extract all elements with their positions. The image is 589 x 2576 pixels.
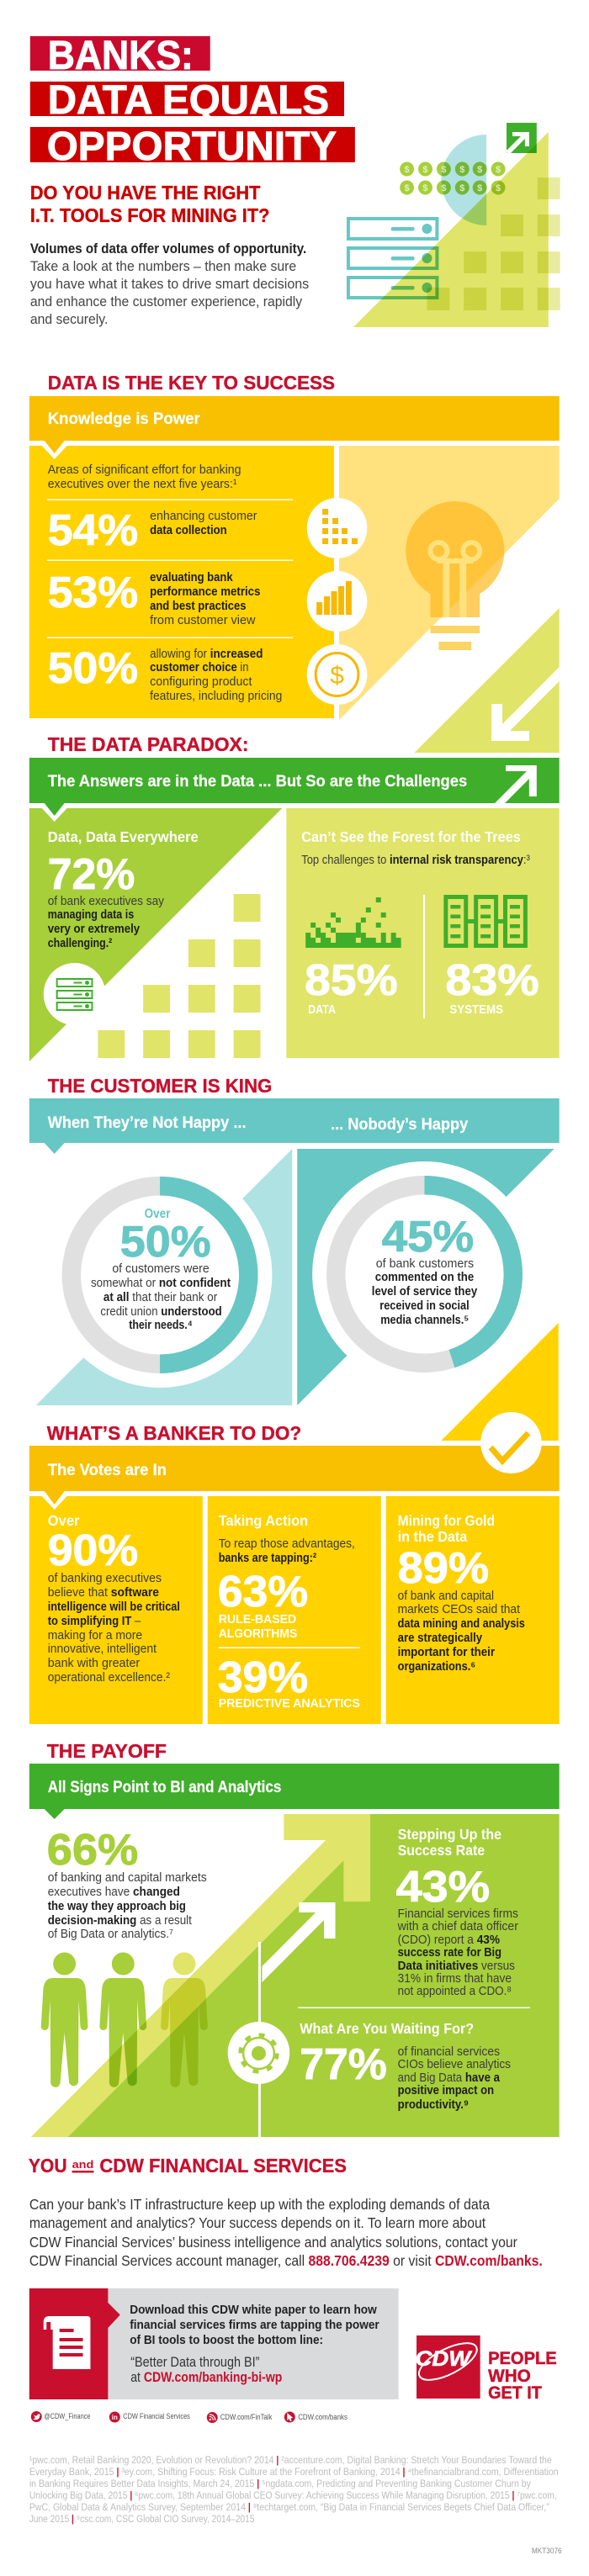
title: OPPORTUNITY bbox=[47, 124, 337, 169]
icon: dollar coins bbox=[400, 161, 505, 195]
stat: 53%: and best practices bbox=[150, 599, 247, 613]
header bar: Knowledge is Power bbox=[48, 410, 200, 428]
stat: 77%: 77% bbox=[300, 2039, 387, 2088]
stat: 43%: with a chief data officer bbox=[397, 1919, 518, 1933]
intro text: Take a look at the numbers – then make sure bbox=[30, 259, 296, 274]
stat: 77% bbox=[300, 2020, 511, 2112]
panel: over 90%: of banking executives bbox=[48, 1571, 162, 1585]
panel: mining for gold bbox=[386, 1496, 560, 1724]
chart: 50% donut: at all that their bank or bbox=[103, 1290, 217, 1304]
stat: 53%: evaluating bank bbox=[150, 570, 233, 584]
panel: data everywhere: 72% bbox=[48, 849, 135, 898]
callout: white paper download bbox=[29, 2288, 399, 2399]
panel: over 90%: making for a more bbox=[48, 1628, 142, 1642]
intro text: Areas of significant effort for banking bbox=[48, 463, 241, 477]
stat: 50%: features, including pricing bbox=[150, 689, 282, 703]
callout: white paper download: of BI tools to boost the bottom line: bbox=[130, 2333, 323, 2347]
panel: can't see the forest: Top challenges to internal risk transparency:³ bbox=[301, 853, 530, 867]
header bar: All Signs Point to BI and Analytics bbox=[48, 1779, 281, 1796]
panel: mining for gold: 89% bbox=[398, 1543, 489, 1592]
icon: pixel stairs bbox=[307, 498, 367, 558]
header bar: The Votes are In bbox=[48, 1462, 167, 1479]
icon: check mark bbox=[480, 1412, 542, 1473]
intro text: and enhance the customer experience, rapidly bbox=[30, 294, 303, 309]
icon: dollar coins: $ bbox=[459, 183, 464, 193]
icon: dollar coins: $ bbox=[459, 165, 464, 175]
panel: data everywhere: managing data is bbox=[48, 907, 134, 922]
title: BANKS: bbox=[48, 34, 194, 78]
intro text bbox=[48, 463, 241, 491]
stat: 50% bbox=[48, 643, 282, 703]
chart: 50% donut bbox=[36, 1149, 292, 1405]
stat: 54%: enhancing customer bbox=[150, 509, 257, 523]
icon: linkedin bbox=[109, 2412, 190, 2422]
chart: 50% donut: 50% bbox=[120, 1217, 211, 1266]
stat: 53%: performance metrics bbox=[150, 584, 260, 599]
icon: servers bbox=[348, 219, 437, 298]
stat: 77%: positive impact on bbox=[398, 2083, 494, 2097]
heading: the payoff: THE PAYOFF bbox=[47, 1740, 167, 1762]
panel: can't see the forest: DATA bbox=[308, 1002, 336, 1017]
footnotes: ¹pwc.com, Retail Banking 2020, Evolution or Revolution? 2014 | ²accenture.com, Digital Banking: Stretch Your Boundaries Toward the bbox=[29, 2454, 552, 2466]
stat: 54% bbox=[48, 505, 257, 554]
stat: 77%: CIOs believe analytics bbox=[398, 2057, 511, 2071]
panel: mining for gold: important for their bbox=[398, 1645, 495, 1659]
panel: over 90%: intelligence will be critical bbox=[48, 1600, 180, 1614]
header bar bbox=[29, 1764, 560, 1819]
chart: 50% donut: somewhat or not confident bbox=[91, 1276, 231, 1290]
icon: dollar coins: $ bbox=[441, 165, 446, 175]
stat: 66%: of Big Data or analytics.⁷ bbox=[48, 1927, 173, 1941]
intro text bbox=[30, 241, 309, 327]
icon: three people bbox=[41, 1953, 208, 2087]
intro text: you have what it takes to drive smart decisions bbox=[30, 277, 309, 292]
panel: taking action: Taking Action bbox=[219, 1512, 308, 1529]
panel: over 90%: to simplifying IT – bbox=[48, 1614, 141, 1628]
chart: 50% donut: Over bbox=[145, 1207, 170, 1221]
closing paragraph: CDW Financial Services’ business intelligence and analytics solutions, contact your bbox=[29, 2234, 517, 2251]
panel: mining for gold: are strategically bbox=[398, 1631, 483, 1645]
panel: data everywhere bbox=[29, 808, 282, 1061]
logo: CDW: GET IT bbox=[488, 2383, 542, 2403]
chart: 50% donut: credit union understood bbox=[100, 1304, 222, 1319]
chart: 45% donut: level of service they bbox=[372, 1284, 478, 1299]
icon: gear bbox=[228, 2022, 289, 2084]
panel: over 90%: bank with greater bbox=[48, 1656, 140, 1670]
illustration: rising arrow background bbox=[31, 1814, 560, 2137]
panel: mining for gold: Mining for Gold bbox=[398, 1512, 495, 1529]
heading: you and cdw financial services: YOU bbox=[29, 2155, 67, 2177]
panel: data everywhere: Data, Data Everywhere bbox=[48, 828, 199, 845]
icon: bar chart bbox=[307, 571, 367, 632]
stat: 54%: data collection bbox=[150, 523, 227, 537]
footnotes: Unlocking Big Data, 2015 | ⁶pwc.com, 18th Annual Global CEO Survey: Achieving Success While Managing Disruption, 2015 | ⁷pwc.com, bbox=[29, 2489, 557, 2501]
panel: can't see the forest: 83% bbox=[445, 955, 539, 1004]
icon: dollar coins: $ bbox=[405, 165, 410, 175]
panel: the votes are in bbox=[29, 1323, 560, 1724]
heading: what's a banker to do: WHAT’S A BANKER TO DO? bbox=[47, 1422, 301, 1444]
icon: cursor bbox=[284, 2412, 348, 2422]
heading: the data paradox: THE DATA PARADOX: bbox=[48, 733, 249, 755]
panel: over 90%: Over bbox=[48, 1512, 80, 1529]
panel: taking action: banks are tapping:² bbox=[219, 1551, 316, 1565]
panel: mining for gold: data mining and analysis bbox=[398, 1616, 525, 1631]
icon: growth arrow square bbox=[506, 123, 537, 155]
logo: CDW: WHO bbox=[488, 2367, 531, 2386]
stat: 77%: and Big Data have a bbox=[398, 2071, 501, 2085]
subtitle question bbox=[30, 182, 269, 226]
stat: 54%: 54% bbox=[48, 505, 138, 554]
footnotes bbox=[29, 2454, 559, 2525]
stat: 43% bbox=[396, 1826, 518, 1998]
icon: dollar coins: $ bbox=[477, 183, 482, 193]
icon: document bbox=[44, 2316, 90, 2369]
footnotes: in Banking Requires Better Data Insights, March 24, 2015 | ⁵ngdata.com, Predicting and Preventing Banking Customer Churn by bbox=[29, 2478, 531, 2489]
stat: 53%: 53% bbox=[48, 568, 138, 616]
stat: 43%: Success Rate bbox=[398, 1842, 485, 1859]
closing paragraph: Can your bank’s IT infrastructure keep up with the exploding demands of data bbox=[29, 2196, 490, 2213]
chart: 45% donut: 45% bbox=[382, 1212, 474, 1261]
stat: 43%: (CDO) report a 43% bbox=[398, 1933, 500, 1947]
chart: 50% donut: their needs.⁴ bbox=[129, 1318, 193, 1332]
stat: 50%: 50% bbox=[48, 643, 138, 692]
stat: 50%: allowing for increased bbox=[150, 647, 263, 661]
stat: 66%: of banking and capital markets bbox=[48, 1870, 207, 1885]
icon: dollar coins: $ bbox=[496, 183, 501, 193]
intro text: executives over the next five years:¹ bbox=[48, 477, 237, 491]
chart: 50% donut: of customers were bbox=[112, 1262, 210, 1276]
icon: dollar coins: $ bbox=[477, 165, 482, 175]
footnotes: June 2015 | ⁹csc.com, CSC Global CIO Survey, 2014–2015 bbox=[29, 2513, 255, 2525]
stat: 66%: decision-making as a result bbox=[48, 1913, 193, 1928]
panel: mining for gold: organizations.⁶ bbox=[398, 1659, 475, 1674]
icon: dollar coins: $ bbox=[422, 183, 428, 193]
footnotes: PwC, Global Data & Analytics Survey, September 2014 | ⁸techtarget.com, “Big Data in Financial Services Begets Chief Data Officer,” bbox=[29, 2501, 549, 2513]
social links bbox=[31, 2411, 348, 2423]
panel: can't see the forest: Can’t See the Forest for the Trees bbox=[301, 828, 521, 845]
closing paragraph bbox=[29, 2196, 543, 2269]
stat: 77%: What Are You Waiting For? bbox=[300, 2020, 474, 2037]
logo: CDW bbox=[414, 2335, 557, 2403]
icon: linkedin: CDW Financial Services bbox=[123, 2412, 190, 2421]
icon: pixel data bbox=[305, 897, 401, 948]
panel: over 90% bbox=[29, 1491, 203, 1724]
stat: 66%: executives have changed bbox=[48, 1885, 180, 1899]
header bar: ... Nobody’s Happy bbox=[331, 1116, 469, 1134]
panel: mining for gold: of bank and capital bbox=[398, 1589, 494, 1603]
chart: 45% donut: of bank customers bbox=[376, 1256, 474, 1271]
icon: cursor: CDW.com/banks bbox=[298, 2413, 348, 2422]
chart: 45% donut: received in social bbox=[379, 1299, 470, 1313]
header bar: The Answers are in the Data ... But So are the Challenges bbox=[48, 773, 467, 791]
subtitle question: DO YOU HAVE THE RIGHT bbox=[30, 182, 260, 204]
panel: the data paradox bbox=[29, 758, 560, 1061]
job code: MKT3076 bbox=[532, 2547, 562, 2555]
panel: knowledge is power bbox=[29, 396, 560, 753]
closing paragraph: management and analytics? Your success depends on it. To learn more about bbox=[29, 2214, 486, 2231]
panel: taking action: ALGORITHMS bbox=[219, 1627, 297, 1641]
callout: white paper download: Download this CDW white paper to learn how bbox=[130, 2303, 377, 2317]
header bar: When They’re Not Happy ... bbox=[48, 1114, 247, 1132]
stat: 77%: productivity.⁹ bbox=[398, 2097, 469, 2112]
panel: taking action: 39% bbox=[218, 1653, 308, 1701]
panel: can't see the forest: SYSTEMS bbox=[449, 1002, 503, 1017]
icon: rss: CDW.com/FinTalk bbox=[220, 2413, 273, 2422]
icon: dollar coin: $ bbox=[330, 662, 344, 690]
panel: over 90%: 90% bbox=[48, 1526, 138, 1574]
stat: 43%: 43% bbox=[396, 1862, 490, 1911]
icon: twitter: @CDW_Finance bbox=[44, 2412, 90, 2421]
header bar bbox=[29, 758, 560, 822]
stat: 53%: from customer view bbox=[150, 613, 256, 627]
heading: you and cdw financial services: CDW FINANCIAL SERVICES bbox=[99, 2155, 347, 2177]
icon: dollar coins: $ bbox=[441, 183, 446, 193]
callout: white paper download: “Better Data through BI” bbox=[130, 2355, 259, 2370]
chart: 45% donut: media channels.⁵ bbox=[380, 1313, 469, 1327]
icon: servers bbox=[44, 963, 105, 1025]
icon: dollar coins: $ bbox=[422, 165, 428, 175]
stat: 43%: not appointed a CDO.⁸ bbox=[398, 1984, 512, 1998]
stat: 66%: the way they approach big bbox=[48, 1899, 186, 1913]
subtitle question: I.T. TOOLS FOR MINING IT? bbox=[30, 204, 269, 226]
illustration: green triangle with arrow bbox=[415, 608, 560, 753]
icon: dollar coins: $ bbox=[496, 165, 501, 175]
panel: taking action: RULE-BASED bbox=[219, 1612, 296, 1627]
stat: 50%: customer choice in bbox=[150, 660, 249, 674]
illustration: light bulb background bbox=[339, 446, 560, 720]
chart: 45% donut: commented on the bbox=[375, 1270, 474, 1284]
stat: 43%: success rate for Big bbox=[398, 1945, 501, 1960]
header bar bbox=[29, 396, 560, 459]
stat: 77%: of financial services bbox=[398, 2044, 500, 2059]
panel: the payoff bbox=[29, 1764, 560, 2137]
header bar bbox=[29, 1098, 560, 1154]
closing paragraph: CDW Financial Services account manager, call 888.706.4239 or visit CDW.com/banks. bbox=[29, 2252, 543, 2269]
intro text: Volumes of data offer volumes of opportunity. bbox=[30, 241, 306, 257]
icon: linkedin: in bbox=[112, 2414, 118, 2421]
title bbox=[30, 34, 355, 169]
stat: 43%: 31% in firms that have bbox=[398, 1971, 512, 1986]
stat: 43%: Stepping Up the bbox=[398, 1826, 501, 1843]
heading: you and cdw financial services: and bbox=[72, 2158, 94, 2171]
callout: white paper download: at CDW.com/banking-bi-wp bbox=[130, 2370, 282, 2385]
stat: 53% bbox=[48, 568, 260, 627]
panel: can't see the forest: 85% bbox=[305, 955, 398, 1004]
stat: 50%: configuring product bbox=[150, 674, 252, 689]
icon: twitter bbox=[31, 2411, 90, 2422]
icon: dollar coins: $ bbox=[405, 183, 410, 193]
icon: up arrow bbox=[495, 765, 537, 803]
footnotes: Everyday Bank, 2015 | ³ey.com, Shifting Focus: Risk Culture at the Forefront of Banking, 2014 | ⁴thefinancialbrand.com, Differentiation bbox=[29, 2466, 559, 2478]
heading: the customer is king: THE CUSTOMER IS KING bbox=[48, 1075, 272, 1097]
icon: dollar coin bbox=[307, 644, 367, 705]
stat: 43%: Financial services firms bbox=[398, 1907, 518, 1921]
panel: the customer is king bbox=[29, 1098, 560, 1405]
stat: 43%: Data initiatives versus bbox=[398, 1959, 515, 1973]
panel: mining for gold: markets CEOs said that bbox=[398, 1602, 521, 1616]
panel: over 90%: innovative, intelligent bbox=[48, 1642, 157, 1656]
panel: data everywhere: challenging.² bbox=[48, 936, 112, 950]
intro text: and securely. bbox=[30, 312, 108, 327]
title: DATA EQUALS bbox=[48, 78, 329, 123]
logo: CDW: PEOPLE bbox=[488, 2349, 557, 2368]
panel: taking action: PREDICTIVE ANALYTICS bbox=[219, 1696, 360, 1711]
icon: rss bbox=[207, 2412, 273, 2423]
panel: data everywhere: very or extremely bbox=[48, 922, 141, 936]
panel: over 90%: believe that software bbox=[48, 1585, 159, 1600]
header bar bbox=[29, 1446, 560, 1510]
chart: 45% donut bbox=[297, 1149, 555, 1405]
logo: CDW: CDW bbox=[416, 2347, 473, 2371]
panel: taking action: 63% bbox=[218, 1567, 308, 1616]
heading: data is the key: DATA IS THE KEY TO SUCCESS bbox=[48, 372, 335, 394]
stat: 66% bbox=[47, 1825, 207, 1941]
panel: taking action bbox=[208, 1496, 381, 1724]
panel: taking action: To reap those advantages, bbox=[219, 1537, 355, 1551]
panel: can't see the forest bbox=[286, 808, 560, 1058]
hero illustration bbox=[348, 123, 560, 327]
panel: mining for gold: in the Data bbox=[398, 1528, 468, 1545]
stat: 66%: 66% bbox=[47, 1825, 138, 1874]
panel: data everywhere: of bank executives say bbox=[48, 894, 164, 908]
icon: server racks bbox=[446, 897, 525, 945]
callout: white paper download: financial services firms are tapping the power bbox=[130, 2318, 379, 2332]
panel: over 90%: operational excellence.² bbox=[48, 1670, 170, 1685]
